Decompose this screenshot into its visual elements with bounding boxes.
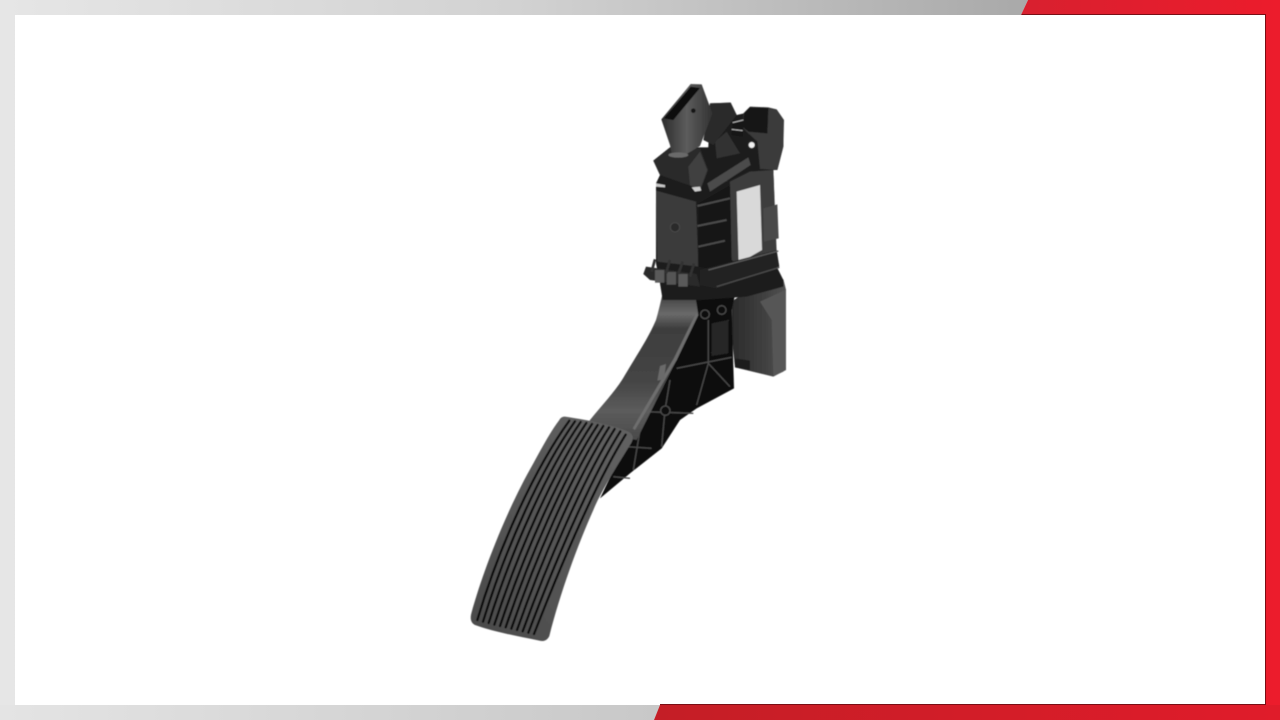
right mounting block bbox=[703, 279, 786, 377]
frame: red bottom bar bbox=[654, 705, 1280, 720]
pivot knob bbox=[743, 107, 784, 170]
frame: grey bottom bar bbox=[0, 705, 660, 720]
side tab bbox=[763, 204, 779, 242]
connector flange bbox=[653, 147, 708, 192]
sensor housing bbox=[643, 84, 784, 300]
pedal arm bbox=[585, 293, 698, 440]
housing left face bbox=[656, 191, 698, 267]
housing silhouette bbox=[653, 103, 783, 300]
housing centre ribs bbox=[698, 183, 735, 270]
housing right face bbox=[730, 170, 777, 267]
frame: red top and right bar bbox=[1021, 0, 1280, 720]
pedal arm web bbox=[600, 295, 735, 498]
white label bbox=[737, 185, 762, 263]
pad ribs bbox=[477, 421, 626, 634]
lower housing ledges bbox=[700, 250, 779, 288]
top bracket bbox=[707, 120, 752, 160]
hinge barrel bbox=[643, 259, 700, 287]
accelerator pedal photo illustration bbox=[471, 84, 786, 641]
pedal pad bbox=[471, 417, 633, 641]
connector plug bbox=[661, 84, 712, 155]
